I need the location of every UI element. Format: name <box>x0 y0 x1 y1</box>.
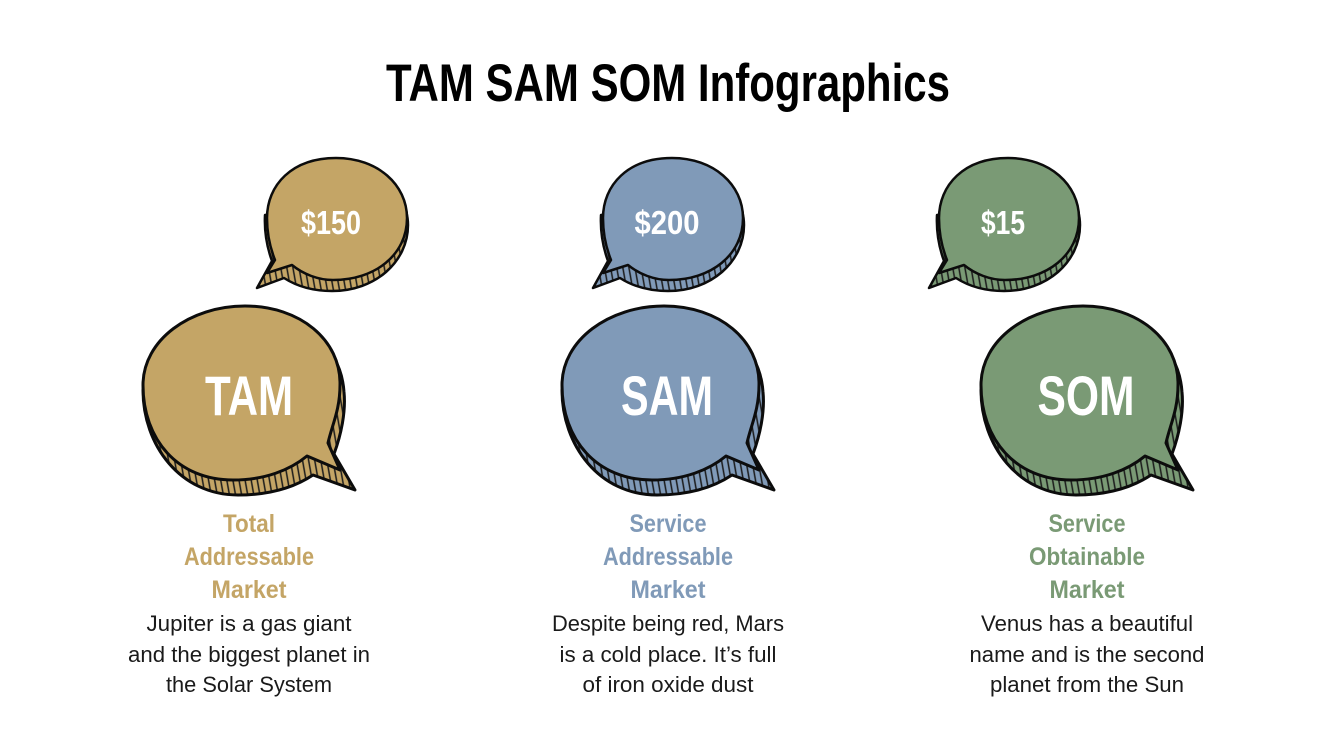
description: SOM: planet from the Sun <box>990 672 1184 697</box>
large speech bubble: SOM: SOM <box>1038 364 1134 427</box>
heading: Service Addressable Market: Service <box>630 510 707 538</box>
small speech bubble: $15 <box>929 158 1080 291</box>
heading: Service Obtainable Market: Service <box>1048 510 1126 538</box>
description: SOM: name and is the second <box>970 642 1204 667</box>
large speech bubble: SOM <box>981 306 1193 495</box>
description: SAM: is a cold place. It’s full <box>560 642 776 667</box>
heading: Total Addressable Market: Market <box>212 576 287 604</box>
description: SAM: of iron oxide dust <box>582 672 754 697</box>
description: SAM <box>552 611 784 697</box>
small speech bubble: $15: $15 <box>981 204 1025 241</box>
panel: SOM <box>929 158 1204 697</box>
description: SOM: Venus has a beautiful <box>981 611 1193 636</box>
heading: Service Obtainable Market: Obtainable <box>1029 543 1145 571</box>
small speech bubble: $150 <box>257 158 408 291</box>
title: TAM SAM SOM Infographics <box>386 54 950 113</box>
description: SOM <box>970 611 1204 697</box>
panel: SAM <box>552 158 784 697</box>
heading: Service Addressable Market: Market <box>630 576 706 604</box>
small speech bubble: $200: $200 <box>634 204 700 241</box>
large speech bubble: SAM: SAM <box>621 364 713 427</box>
large speech bubble: SAM <box>562 306 774 495</box>
small speech bubble: $200 <box>593 158 744 291</box>
heading: Total Addressable Market <box>184 510 314 604</box>
heading: Total Addressable Market: Addressable <box>184 543 314 571</box>
large speech bubble: TAM <box>143 306 355 495</box>
heading: Service Obtainable Market <box>1029 510 1145 604</box>
description: TAM: Jupiter is a gas giant <box>146 611 352 636</box>
panel: TAM <box>128 158 408 697</box>
description: TAM: and the biggest planet in <box>128 642 370 667</box>
description: SAM: Despite being red, Mars <box>552 611 784 636</box>
small speech bubble: $150: $150 <box>301 204 361 241</box>
heading: Service Obtainable Market: Market <box>1050 576 1125 604</box>
description: TAM: the Solar System <box>166 672 332 697</box>
description: TAM <box>128 611 370 697</box>
large speech bubble: TAM: TAM <box>205 364 293 427</box>
heading: Total Addressable Market: Total <box>223 510 275 538</box>
heading: Service Addressable Market <box>603 510 733 604</box>
heading: Service Addressable Market: Addressable <box>603 543 733 571</box>
